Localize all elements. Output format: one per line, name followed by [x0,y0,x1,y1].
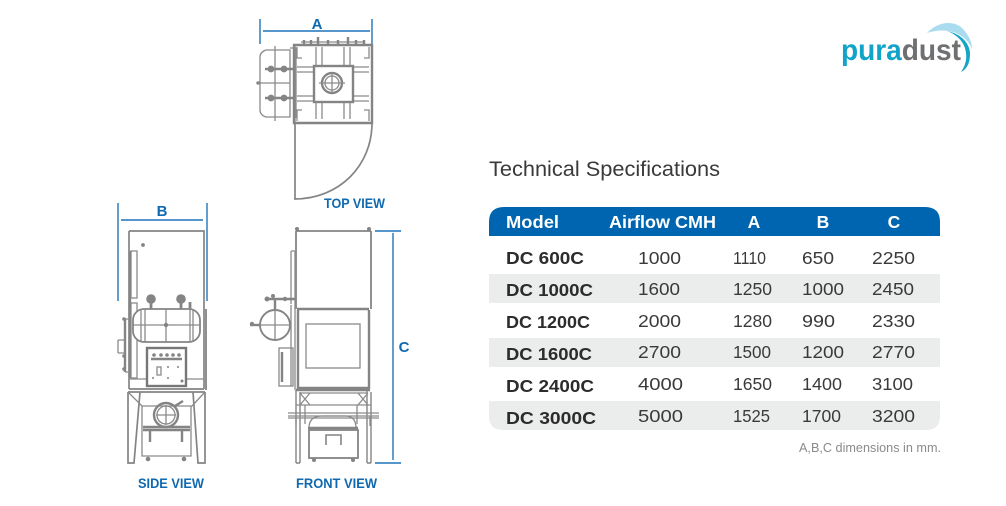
row DC 3000C [489,401,940,430]
row DC 1200C: 990 [802,311,835,331]
front view label: FRONT VIEW [296,475,378,491]
row DC 1200C: 2000 [638,311,681,331]
row DC 1000C: 1250 [733,279,772,299]
front view side box [279,304,295,390]
row DC 1600C: 2700 [638,342,681,362]
specifications table [489,207,940,430]
table header: B [817,212,829,232]
row DC 600C: 650 [802,248,834,268]
top view air tank [256,46,296,121]
logo [841,23,972,72]
row DC 1600C: DC 1600C [506,344,592,364]
side view drawing [118,203,207,491]
dimension C [375,231,410,463]
front view air tank [250,294,295,340]
logo wordmark: puradust [841,34,961,67]
side view air tank [133,294,200,342]
row DC 2400C: 1400 [802,374,842,394]
row DC 2400C: 4000 [638,374,683,394]
row DC 3000C: 1700 [802,406,841,426]
row DC 600C: 1110 [733,248,766,268]
row DC 1200C: 2330 [872,311,915,331]
dimension B: B [157,203,168,220]
dimension C: C [399,339,410,356]
row DC 600C: 2250 [872,248,915,268]
row DC 600C: DC 600C [506,248,584,268]
row DC 1000C: 2450 [872,279,914,299]
side view label: SIDE VIEW [138,475,205,491]
side view control box [147,348,186,386]
front view drawing [250,227,410,491]
dimension B [118,203,207,301]
row DC 600C [506,248,915,268]
row DC 3000C: 1525 [733,406,770,426]
table header [489,207,940,236]
row DC 2400C [506,374,913,396]
row DC 2400C: DC 2400C [506,376,594,396]
side view latch [118,317,130,372]
logo swoosh [927,23,972,72]
dimension A [260,16,372,44]
dimension A: A [312,16,323,33]
row DC 1000C: 1600 [638,279,680,299]
row DC 1200C [506,311,915,332]
row DC 1200C: DC 1200C [506,312,590,332]
row DC 1200C: 1280 [733,311,772,331]
front view lower panel with window [296,310,370,390]
top view drawing [256,16,386,211]
row DC 1600C: 1200 [802,342,844,362]
side view cabinet [129,231,206,390]
front view upper cabinet [291,227,371,309]
section heading: Technical Specifications [489,157,720,181]
table header: Model [506,212,559,232]
table header: A [748,212,761,232]
row DC 2400C: 1650 [733,374,772,394]
top view door swing [294,123,372,199]
dimensions footnote: A,B,C dimensions in mm. [799,441,941,455]
front view hopper, bin and legs [288,390,379,463]
top view cabinet body [294,37,372,123]
top view label: TOP VIEW [324,195,386,211]
row DC 1000C: DC 1000C [506,280,593,300]
side view hopper and legs [128,392,205,463]
table header: C [888,212,901,232]
row DC 1000C: 1000 [802,279,844,299]
row DC 2400C: 3100 [872,374,913,394]
row DC 1000C [489,274,940,303]
row DC 1600C: 2770 [872,342,915,362]
table header: Airflow CMH [609,212,716,232]
row DC 3000C: 5000 [638,406,683,426]
row DC 1600C: 1500 [733,342,771,362]
row DC 600C: 1000 [638,248,681,268]
row DC 3000C: DC 3000C [506,408,596,428]
row DC 3000C: 3200 [872,406,915,426]
row DC 1600C [489,338,940,367]
